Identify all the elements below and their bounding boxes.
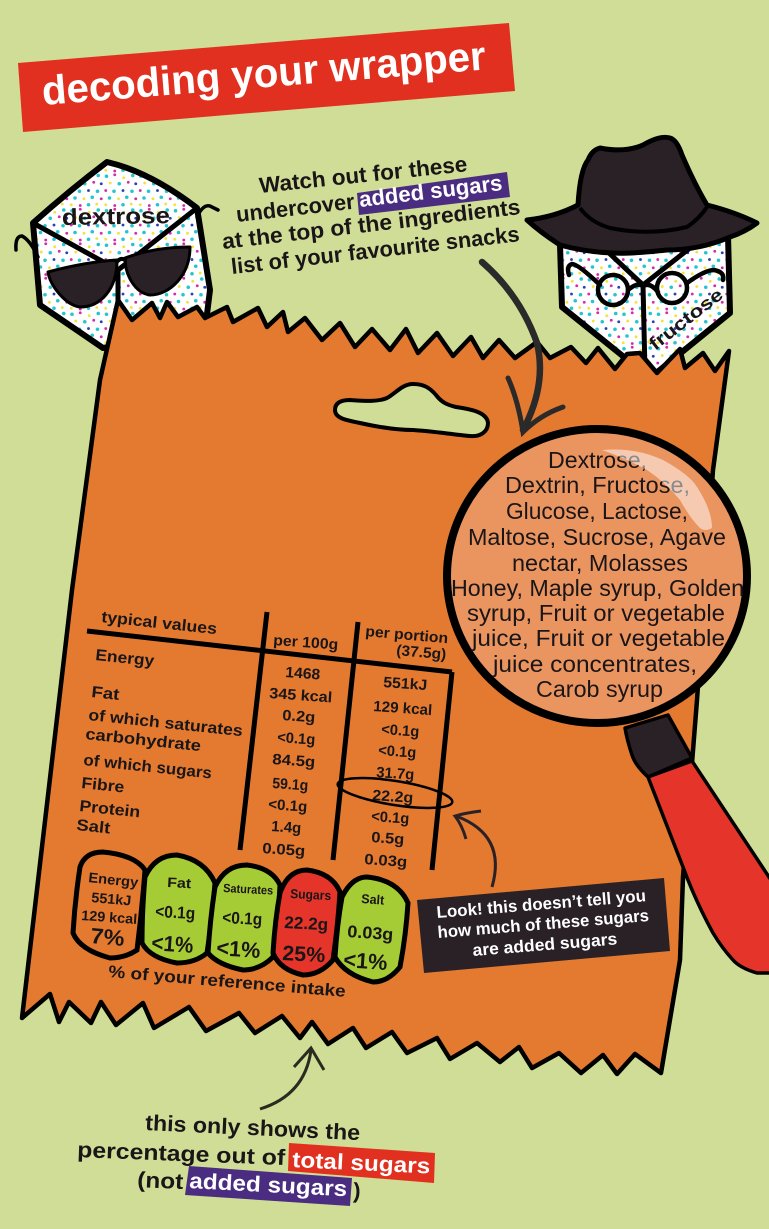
nutrition table: Salt — [76, 817, 112, 838]
magnifying glass — [447, 429, 769, 973]
label: saturates — [208, 865, 280, 970]
label: saturates: Saturates — [223, 881, 274, 898]
icon: round glasses — [568, 264, 723, 305]
nutrition table: <0.1g — [381, 721, 420, 741]
label: sugars — [273, 870, 340, 975]
nutrition table: 0.03g — [364, 851, 408, 871]
label: salt: <1% — [343, 947, 388, 975]
caption: percentage of total sugars: percentage out of — [77, 1137, 286, 1170]
sugar names list: Dextrose, — [548, 447, 647, 473]
sugar names list: Maltose, Sucrose, Agave — [468, 524, 726, 550]
character: dextrose sugar cube — [16, 162, 218, 348]
caption: percentage of total sugars: this only shows the — [145, 1110, 361, 1145]
sugar names list: Glucose, Lactose, — [506, 498, 688, 524]
nutrition table: 129 kcal — [373, 698, 433, 719]
wrapper hang hole — [335, 384, 488, 436]
character: dextrose sugar cube: dextrose — [62, 202, 170, 230]
label: fat: <0.1g — [155, 902, 196, 923]
label: energy: 129 kcal — [81, 907, 138, 927]
nutrition table: per 100g — [273, 632, 339, 654]
nutrition table: Fat — [91, 684, 121, 704]
note: added sugars warning: Look! this doesn’t tell you — [436, 886, 647, 922]
character: fructose sugar cube: fructose — [645, 284, 727, 354]
sugar names list: nectar, Molasses — [512, 550, 688, 576]
nutrition table: Energy — [95, 647, 155, 670]
nutrition table: of which saturates — [88, 707, 244, 740]
nutrition table: carbohydrate — [85, 726, 202, 755]
nutrition table: 1468 — [285, 664, 321, 683]
nutrition table: 84.5g — [272, 751, 316, 771]
icon: detective hat — [527, 137, 757, 253]
nutrition table: Protein — [79, 798, 141, 821]
arrow: callout to magnifier — [482, 262, 563, 432]
nutrition table: <0.1g — [378, 742, 417, 762]
nutrition table: 22.2g — [372, 787, 414, 807]
sugar names list: syrup, Fruit or vegetable — [467, 600, 725, 626]
caption: percentage of total sugars — [77, 1110, 435, 1206]
title banner: decoding your wrapper — [40, 32, 487, 114]
highlight ring around sugars value — [336, 772, 454, 814]
icon: sunglasses — [48, 247, 190, 307]
nutrition table: 1.4g — [271, 818, 302, 837]
note: added sugars warning: are added sugars — [472, 929, 618, 960]
sugar names list: Dextrin, Fructose, — [505, 472, 690, 498]
callout: undercover added sugars: added sugars — [358, 170, 504, 212]
traffic-light nutrition labels — [73, 852, 408, 982]
title banner — [18, 23, 515, 132]
callout: undercover added sugars: Watch out for these — [258, 151, 468, 198]
label: energy: Energy — [88, 869, 139, 890]
nutrition table: per portion — [365, 623, 449, 647]
lens glare — [602, 449, 712, 530]
nutrition table: 59.1g — [272, 775, 309, 795]
nutrition table: <0.1g — [268, 796, 308, 816]
label: energy — [73, 852, 145, 958]
note: added sugars warning: how much of these sugars — [437, 906, 650, 942]
label: salt — [335, 877, 408, 982]
nutrition table: 0.5g — [371, 829, 405, 848]
nutrition table: (37.5g) — [396, 642, 447, 663]
arrow: caption to wrapper edge — [260, 1048, 324, 1109]
note: added sugars warning — [417, 878, 670, 973]
label: salt: 0.03g — [347, 922, 394, 944]
caption: percentage of total sugars: ) — [353, 1178, 361, 1203]
nutrition table: 31.7g — [376, 764, 415, 784]
label: energy: 7% — [90, 923, 126, 951]
character: fructose sugar cube — [527, 137, 757, 378]
nutrition table: 551kJ — [383, 674, 428, 694]
magnifier lens — [447, 429, 747, 723]
nutrition table: <0.1g — [371, 808, 410, 828]
sugar names list: Carob syrup — [536, 676, 663, 702]
sugar names list: juice, Fruit or vegetable — [471, 625, 725, 651]
nutrition table: of which sugars — [83, 752, 213, 782]
sugar names list: juice concentrates, — [492, 651, 697, 677]
nutrition table: 345 kcal — [269, 685, 333, 706]
snack wrapper — [22, 300, 729, 1074]
nutrition table: 0.2g — [282, 707, 316, 726]
label: fat: <1% — [151, 930, 194, 958]
caption: reference intake: % of your reference intake — [108, 962, 346, 1001]
sugar names list — [451, 447, 744, 702]
arrow: note to highlighted value — [455, 811, 495, 887]
caption: percentage of total sugars: added sugars — [189, 1168, 348, 1201]
callout: undercover added sugars: at the top of the ingredients — [221, 194, 522, 254]
label: saturates: <1% — [216, 935, 261, 963]
nutrition table: 0.05g — [262, 840, 306, 860]
label: fat: Fat — [167, 874, 192, 891]
magnifier handle — [625, 715, 769, 973]
label: saturates: <0.1g — [222, 908, 263, 929]
nutrition table: <0.1g — [277, 729, 316, 749]
caption: percentage of total sugars: (not — [137, 1167, 185, 1194]
caption: percentage of total sugars: total sugars — [292, 1147, 431, 1178]
label: energy: 551kJ — [91, 889, 132, 908]
label: sugars: Sugars — [290, 886, 332, 903]
label: sugars: 25% — [282, 942, 326, 967]
callout: undercover added sugars: list of your favourite snacks — [230, 221, 521, 279]
label: fat — [142, 855, 215, 963]
nutrition table — [76, 609, 454, 871]
callout: undercover added sugars: undercover — [235, 189, 356, 227]
callout: undercover added sugars — [221, 151, 522, 279]
nutrition table: Fibre — [81, 775, 125, 796]
label: sugars: 22.2g — [284, 913, 329, 934]
sugar names list: Honey, Maple syrup, Golden — [451, 575, 744, 601]
nutrition table: typical values — [101, 609, 218, 638]
label: salt: Salt — [361, 891, 385, 908]
